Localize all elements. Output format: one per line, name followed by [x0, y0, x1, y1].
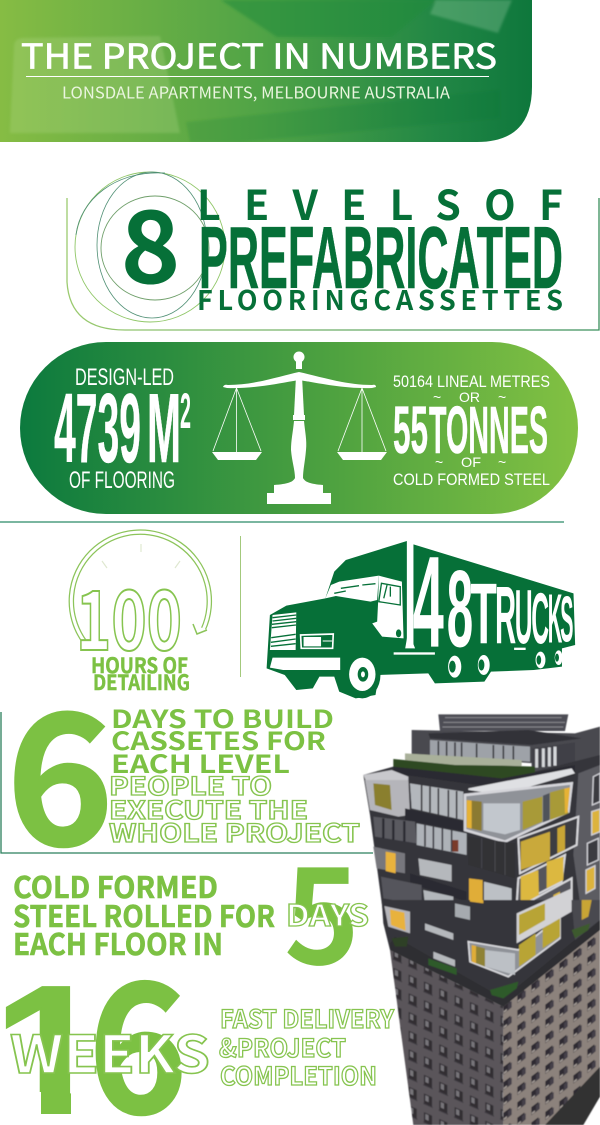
- design-led text: DESIGN-LED: [75, 364, 174, 391]
- panel: flooring and steel pill: 2: [180, 383, 191, 439]
- 48 trucks lettering: [413, 530, 574, 675]
- days to build text: DAYS TO BUILD: [111, 700, 334, 736]
- days to build text: CASSETES FOR: [111, 722, 326, 758]
- steel rolled text: [13, 863, 275, 964]
- 48 trucks lettering: T: [471, 567, 497, 662]
- upper tower: [363, 714, 600, 915]
- building render: [363, 714, 600, 1125]
- icon: truck: [267, 541, 575, 698]
- panel: 48 trucks: [267, 530, 575, 698]
- steel rolled text: STEEL ROLLED FOR: [13, 892, 275, 936]
- of separator: ~: [435, 454, 443, 470]
- 55 tonnes figure: [393, 393, 548, 468]
- people outline text: [109, 767, 360, 850]
- days to build text: EACH LEVEL: [111, 745, 290, 781]
- detailing: DETAILING: [93, 667, 190, 697]
- or separator: ~: [498, 389, 506, 405]
- 4739 m2 figure: M: [147, 373, 181, 483]
- title: THE PROJECT IN NUMBERS: [21, 30, 497, 78]
- 48 trucks lettering: 8: [447, 549, 473, 671]
- or separator: ~: [433, 389, 441, 405]
- big number 6: 6: [6, 635, 114, 898]
- 4739 m2 figure: 4739: [54, 373, 141, 483]
- people outline text: PEOPLE TO: [109, 767, 272, 803]
- 48 trucks lettering: C: [531, 579, 549, 659]
- steel length text: 50164 LINEAL METRES: [393, 372, 550, 391]
- levels of: LEVELSOF: [197, 172, 563, 232]
- cold formed steel: COLD FORMED STEEL: [393, 470, 550, 489]
- panel: 8 levels of prefabricated flooring cassettes: [67, 167, 599, 330]
- panel: 16 weeks: [6, 980, 395, 1116]
- 48 trucks lettering: U: [515, 575, 533, 660]
- icon: balance scales: [212, 352, 387, 504]
- or separator: OR: [459, 389, 480, 405]
- lower tower: [382, 888, 600, 1125]
- 48 trucks lettering: R: [495, 571, 516, 661]
- 48 trucks lettering: K: [548, 579, 562, 657]
- of separator: [435, 454, 506, 470]
- big number 8: 8: [120, 167, 180, 312]
- panel: flooring and steel pill: [20, 342, 578, 514]
- flooring cassettes: FLOORINGCASSETTES: [197, 279, 563, 318]
- people outline text: EXECUTE THE: [109, 791, 308, 827]
- days outline: DAYS: [286, 891, 369, 935]
- of separator: OF: [461, 454, 481, 470]
- panel: 100 hours of detailing: [71, 532, 209, 697]
- panel: header banner: [0, 0, 532, 142]
- people outline text: WHOLE PROJECT: [109, 814, 360, 850]
- panel: days and people: [1, 635, 373, 898]
- panel: steel rolled in 5 days: [13, 809, 369, 1003]
- 48 trucks lettering: 4: [413, 530, 444, 675]
- big number 16: [6, 980, 182, 1116]
- days to build text: [111, 700, 334, 781]
- fast delivery outline text: [219, 1000, 394, 1093]
- 55 tonnes figure: 55: [393, 393, 428, 468]
- fast delivery outline text: COMPLETION: [220, 1057, 377, 1093]
- of separator: ~: [498, 454, 506, 470]
- 4739 m2 figure: [54, 373, 191, 483]
- fast delivery outline text: &PROJECT: [219, 1029, 346, 1065]
- of flooring: OF FLOORING: [69, 467, 175, 494]
- icon: gauge arrow: [71, 532, 209, 641]
- hours of: HOURS OF: [91, 650, 188, 680]
- fast delivery outline text: FAST DELIVERY: [220, 1000, 394, 1036]
- big number 5: 5: [284, 809, 360, 1003]
- or separator: [433, 389, 506, 405]
- weeks outline: WEEKS: [10, 1013, 210, 1088]
- subtitle: LONSDALE APARTMENTS, MELBOURNE AUSTRALIA: [62, 80, 450, 104]
- steel rolled text: COLD FORMED: [13, 863, 218, 907]
- 100 outline number: 100: [76, 555, 182, 674]
- steel rolled text: EACH FLOOR IN: [13, 920, 223, 964]
